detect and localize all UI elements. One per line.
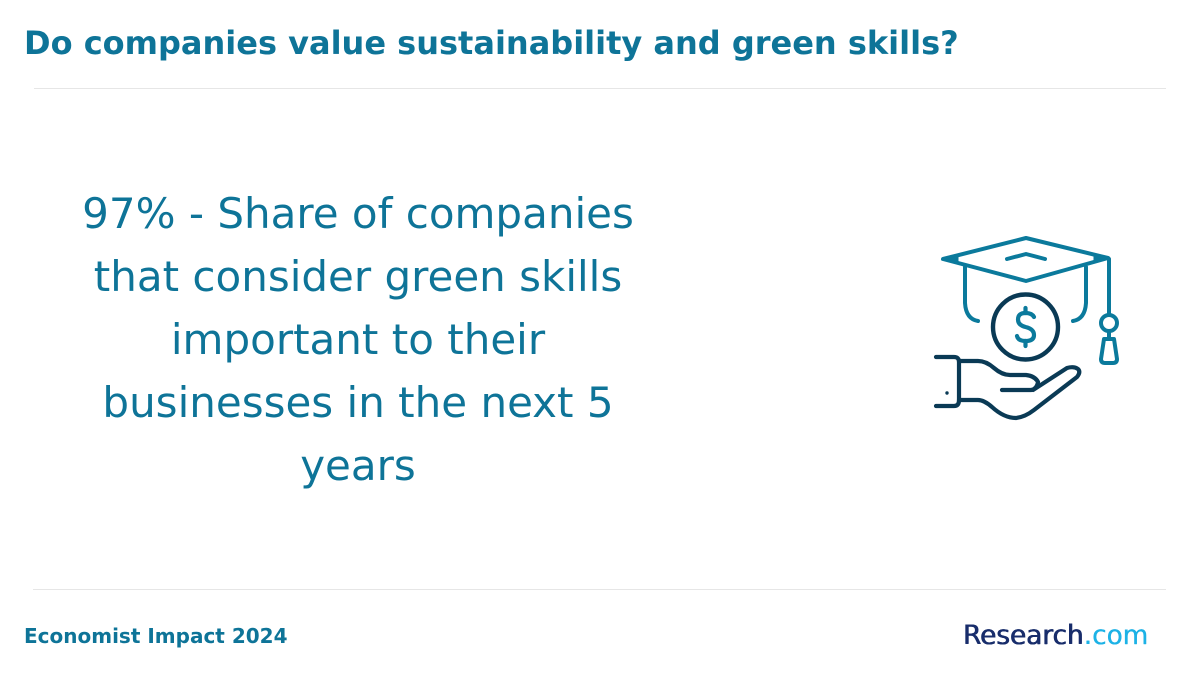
icon: dollar coin — [993, 294, 1058, 360]
main statistic text: that consider green skills — [94, 252, 622, 301]
icon: graduation cap with dollar coin over hand — [934, 236, 1119, 420]
main statistic text: businesses in the next 5 — [102, 378, 614, 427]
main statistic text — [82, 189, 634, 490]
source note: Economist Impact 2024 — [24, 624, 288, 648]
title: Do companies value sustainability and green skills? — [24, 24, 959, 62]
logo: Research.com: Research.com — [963, 621, 1148, 651]
icon: graduation cap — [943, 238, 1117, 363]
icon: hand — [936, 357, 1079, 418]
main statistic text: 97% - Share of companies — [82, 189, 634, 238]
main statistic text: important to their — [171, 315, 545, 364]
main statistic text: years — [300, 441, 416, 490]
